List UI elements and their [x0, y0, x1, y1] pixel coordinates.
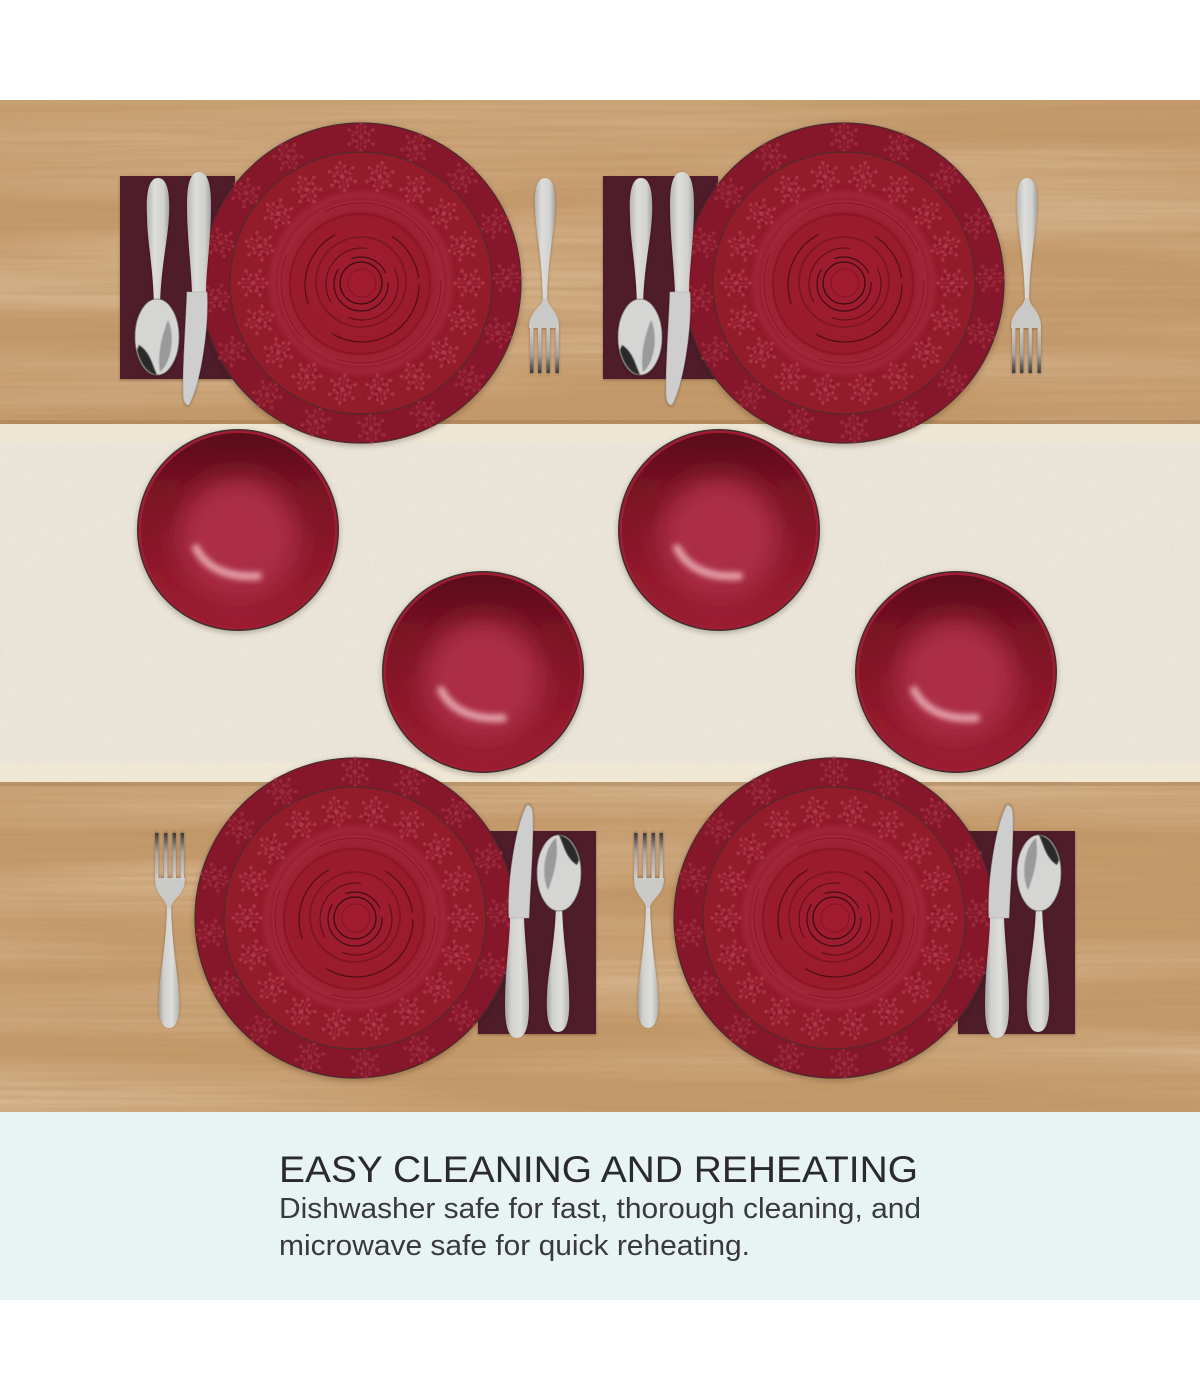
description text: Dishwasher safe for fast, thorough cleaning, and [279, 1193, 921, 1225]
fork [634, 833, 664, 1028]
place setting: bottom left [155, 756, 596, 1080]
spoon [1017, 835, 1061, 1032]
cream linen table runner [0, 424, 1200, 782]
heading: EASY CLEANING AND REHEATING [279, 1149, 918, 1190]
description text: microwave safe for quick reheating. [279, 1230, 750, 1262]
knife [666, 172, 694, 405]
fork [529, 178, 559, 373]
spoon [537, 835, 581, 1032]
napkin [958, 831, 1075, 1034]
dinner plate with salad plate [682, 121, 1006, 445]
bowl: lower right [855, 571, 1057, 773]
place setting: bottom right [634, 756, 1075, 1080]
place setting: top left [120, 121, 559, 445]
caption panel [0, 1112, 1200, 1300]
knife [985, 805, 1013, 1038]
napkin [120, 176, 235, 379]
spoon [135, 178, 179, 375]
dinner plate with salad plate [672, 756, 996, 1080]
knife [183, 172, 211, 405]
dinner plate with salad plate [199, 121, 523, 445]
fork [1011, 178, 1041, 373]
description text [279, 1193, 921, 1262]
knife [505, 805, 533, 1038]
dinner plate with salad plate [193, 756, 517, 1080]
table photo: wooden tabletop [0, 100, 1200, 1112]
bowl: upper left [137, 429, 339, 631]
fork [155, 833, 185, 1028]
place setting: top right [603, 121, 1041, 445]
bowl: upper right [618, 429, 820, 631]
napkin [478, 831, 596, 1034]
napkin [603, 176, 718, 379]
spoon [618, 178, 662, 375]
bowl: lower left [382, 571, 584, 773]
